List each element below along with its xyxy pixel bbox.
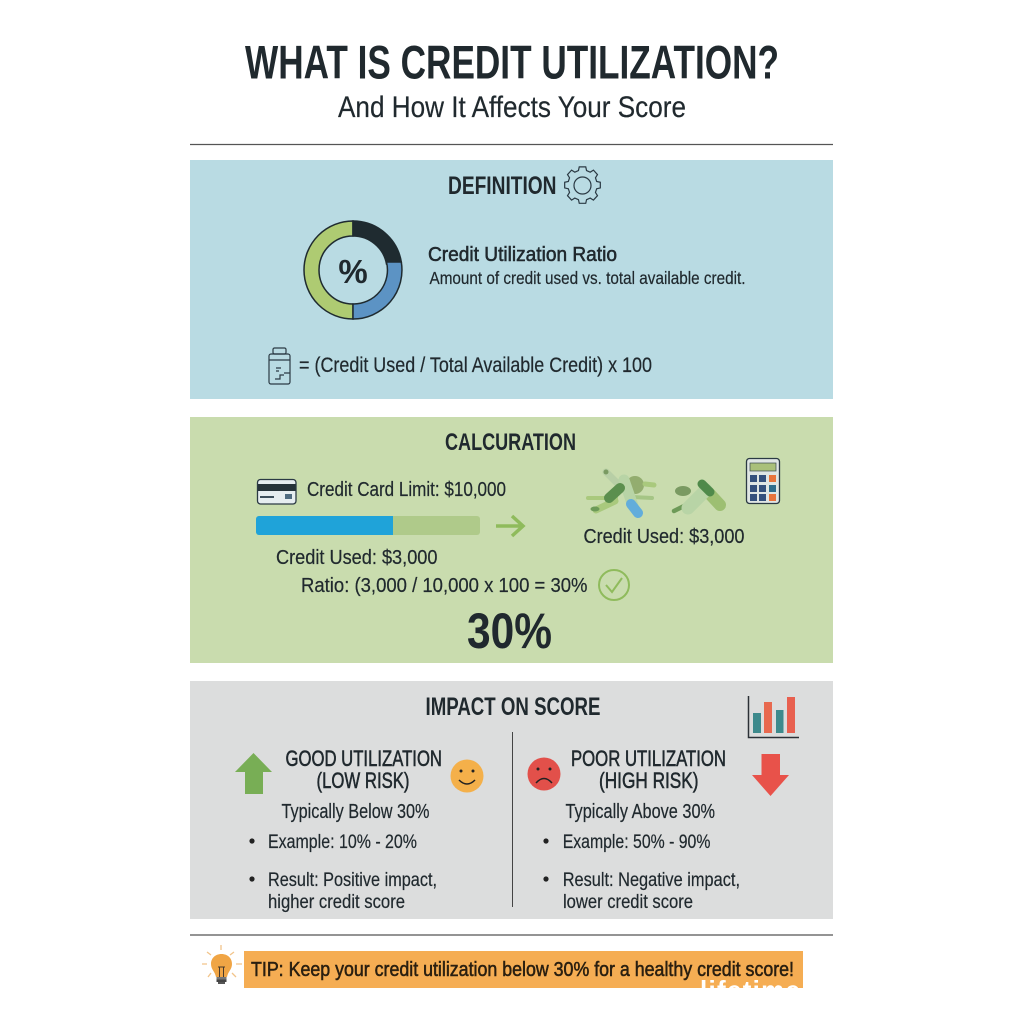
panel: impact on score [190,681,833,919]
icon: abstract leaves [588,470,720,513]
list item: result: lower credit score [563,892,693,913]
icon: check mark [599,570,629,600]
heading: good utilization: GOOD UTILIZATION [286,746,442,771]
chart: utilization donut [304,221,402,319]
watermark: lifetime [700,975,800,1005]
panel: calculation [190,417,833,663]
arrow: to credit used [496,516,523,536]
heading: low risk: (LOW RISK) [316,768,410,793]
icon: light bulb [202,945,242,984]
heading: poor utilization: POOR UTILIZATION [571,746,726,771]
chart: utilization donut: % [338,253,368,290]
list item: example: Example: 50% - 90% [563,832,710,853]
heading: definition: DEFINITION [448,172,556,200]
text: typically above: Typically Above 30% [566,801,715,823]
banner: tip [244,951,803,988]
text: credit used left: Credit Used: $3,000 [276,546,438,569]
banner: tip: TIP: Keep your credit utilization below 30% for a healthy credit score! [251,958,794,981]
text: ratio calculation: Ratio: (3,000 / 10,000 x 100 = 30% [301,575,588,597]
text: ratio description: Amount of credit used vs. total available credit. [430,268,746,288]
bar: credit used share [256,516,480,535]
icon: green up arrow [235,753,272,794]
icon: formula jar [269,348,290,384]
icon: smiley [450,760,484,792]
icon: credit card [258,480,296,504]
list item: result: higher credit score [268,892,405,913]
heading: impact on score: IMPACT ON SCORE [426,693,600,721]
big number: 30 percent: 30% [467,603,552,659]
text: typically below: Typically Below 30% [282,801,430,823]
heading: high risk: (HIGH RISK) [599,768,698,793]
text: card limit: Credit Card Limit: $10,000 [307,479,506,501]
icon: bar chart [748,696,799,738]
text: credit used right: Credit Used: $3,000 [584,525,744,548]
icon: red down arrow [752,754,789,796]
text: ratio name: Credit Utilization Ratio [428,243,617,266]
column: good utilization [235,746,484,913]
list item: result [543,870,740,913]
icon: calculator [746,458,780,504]
list item: result: Result: Negative impact, [563,870,740,891]
panel: definition [190,160,833,399]
title: WHAT IS CREDIT UTILIZATION? [245,36,779,88]
list item: example: Example: 10% - 20% [268,832,417,853]
heading: calculation: CALCURATION [445,429,576,456]
text: formula: = (Credit Used / Total Available Credit) x 100 [299,354,652,377]
icon: frowny [528,758,560,790]
subtitle: And How It Affects Your Score [338,91,686,124]
list item: result [249,870,437,913]
list item: result: Result: Positive impact, [268,870,437,891]
column: poor utilization [528,746,789,913]
icon: gear [565,167,600,203]
